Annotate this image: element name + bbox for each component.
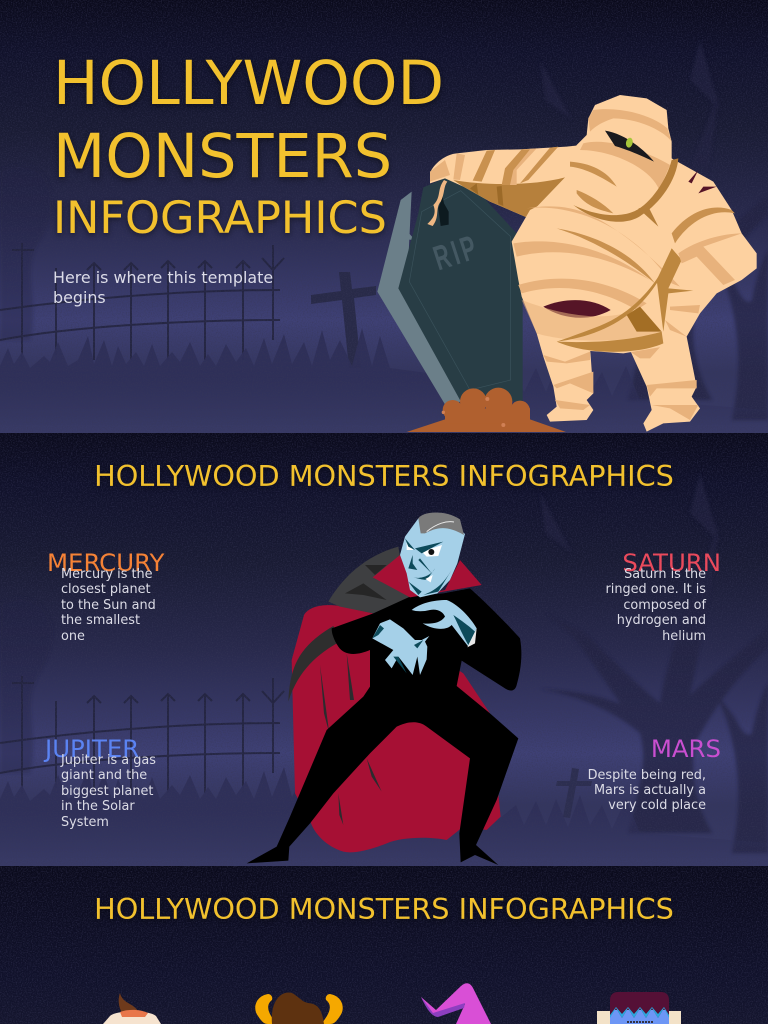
head [564, 95, 672, 215]
text: Saturn [605, 567, 706, 644]
text: Saturn: ringed one. It is [605, 582, 706, 597]
panel: Mars [588, 734, 721, 813]
label: Mars: MARS [651, 734, 721, 763]
icon: mummy [427, 95, 757, 432]
title [53, 49, 444, 192]
text: Mars: Mars is actually a [594, 783, 706, 798]
icon: tombstone [377, 177, 523, 408]
text: Mercury: closest planet [61, 582, 151, 597]
intro text [53, 268, 273, 306]
panel: Jupiter [44, 734, 156, 830]
icon: grey cape lining [288, 547, 412, 702]
illustration: tombstone and mummy [377, 95, 757, 432]
icon: vampire suit [247, 588, 521, 865]
title: HOLLYWOOD [53, 49, 444, 119]
text: Jupiter: giant and the [61, 768, 147, 783]
text: Jupiter: Jupiter is a gas [61, 753, 156, 768]
icon: right hand [412, 600, 477, 647]
text: Saturn: hydrogen and [617, 613, 706, 628]
text: Mercury: the smallest [61, 613, 140, 628]
torso [512, 158, 757, 353]
text: Mars: very cold place [608, 798, 706, 813]
intro text: Here is where this template [53, 268, 273, 287]
arm [430, 143, 603, 217]
icon: vampire head [400, 512, 465, 597]
icon: witch hat [421, 983, 491, 1024]
icon: left hand [372, 619, 429, 675]
heading: slide 2: HOLLYWOOD MONSTERS INFOGRAPHICS [94, 459, 674, 493]
heading: slide 3: HOLLYWOOD MONSTERS INFOGRAPHICS [94, 892, 674, 926]
text: Mercury: to the Sun and [61, 598, 156, 613]
icon: devil head [255, 992, 343, 1024]
label: Mercury: MERCURY [47, 548, 164, 577]
icon: tombstone: RIP [429, 228, 484, 279]
text: Mercury [61, 567, 156, 644]
text: Jupiter [60, 753, 156, 830]
text: Mars [588, 768, 706, 813]
icon: frankenstein head [597, 992, 681, 1024]
text: Mercury: Mercury is the [61, 567, 153, 582]
title: MONSTERS [53, 122, 392, 192]
panel: Saturn [605, 548, 721, 644]
panel: Mercury [47, 548, 164, 644]
icon: dirt mound [407, 388, 566, 432]
intro text: begins [53, 288, 106, 306]
label: Jupiter: JUPITER [45, 734, 139, 763]
icon: red cape [292, 605, 501, 852]
icon: collar [373, 555, 482, 597]
icon: mummy head [103, 993, 161, 1024]
text: Jupiter: System [61, 815, 109, 830]
text: Jupiter: biggest planet [61, 784, 153, 799]
text: Mars: Despite being red, [588, 768, 706, 782]
text: Saturn: Saturn is the [624, 567, 706, 582]
text: Saturn: helium [662, 629, 706, 644]
label: Saturn: SATURN [622, 548, 721, 577]
text: Jupiter: in the Solar [61, 799, 135, 814]
text: Saturn: composed of [623, 598, 706, 613]
text: Mercury: one [61, 629, 85, 644]
subtitle: INFOGRAPHICS [53, 193, 387, 244]
